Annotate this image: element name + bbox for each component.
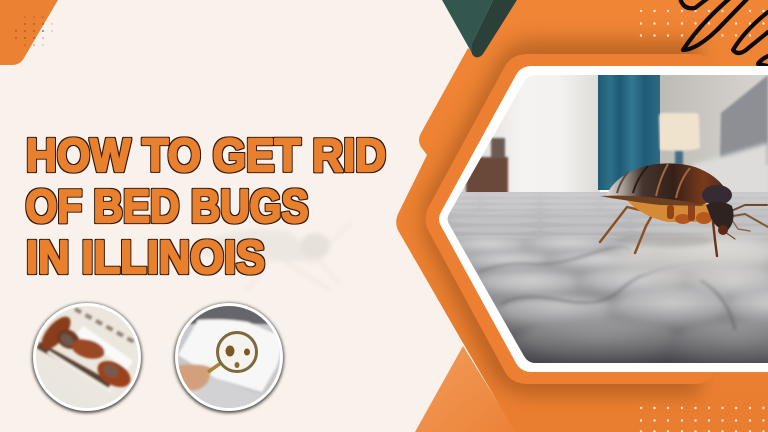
photo: lamp — [659, 113, 700, 165]
black scribble — [680, 0, 768, 66]
dark green triangle — [442, 0, 517, 58]
photo: room wall and sheer curtain — [440, 70, 768, 200]
title line 1: HOW TO GET RID — [26, 129, 386, 181]
bug head — [702, 185, 734, 235]
main photo: bed bug on mattress — [440, 70, 768, 378]
dot grid top right — [640, 10, 765, 37]
bug abdomen rim — [600, 196, 704, 206]
photo: mattress — [448, 192, 768, 363]
bug legs — [600, 205, 768, 256]
dot grid top left — [15, 16, 53, 46]
inner orange hexagon frame — [426, 54, 716, 384]
outer orange hexagon backdrop — [396, 0, 768, 432]
dot grid bottom right — [640, 407, 765, 432]
magnifier — [218, 332, 256, 372]
hand — [176, 364, 212, 390]
photo: dresser — [466, 138, 508, 195]
photo: mattress creases — [478, 247, 735, 330]
background watermark bug — [190, 222, 352, 292]
circular photo: magnifying glass over pillows — [174, 300, 285, 420]
photo: headboard — [720, 75, 768, 165]
title line 3: IN ILLINOIS — [26, 231, 265, 283]
circular photo: bed bugs on mattress seam — [30, 300, 145, 425]
top-left corner shape — [0, 0, 58, 65]
title line 2: OF BED BUGS — [26, 180, 308, 232]
lower light triangle — [415, 346, 516, 432]
bug abdomen ridges — [617, 164, 690, 198]
bug abdomen — [606, 163, 728, 205]
white hexagon frame — [439, 66, 768, 372]
title — [26, 129, 386, 283]
photo: pillow — [692, 141, 768, 192]
photo: bed bug — [600, 163, 768, 256]
photo: teal curtain — [598, 70, 660, 190]
bug shadow — [615, 233, 715, 247]
bugs in seam — [40, 315, 72, 350]
photo: quilted puffs — [459, 237, 768, 363]
bug underside — [627, 200, 712, 222]
